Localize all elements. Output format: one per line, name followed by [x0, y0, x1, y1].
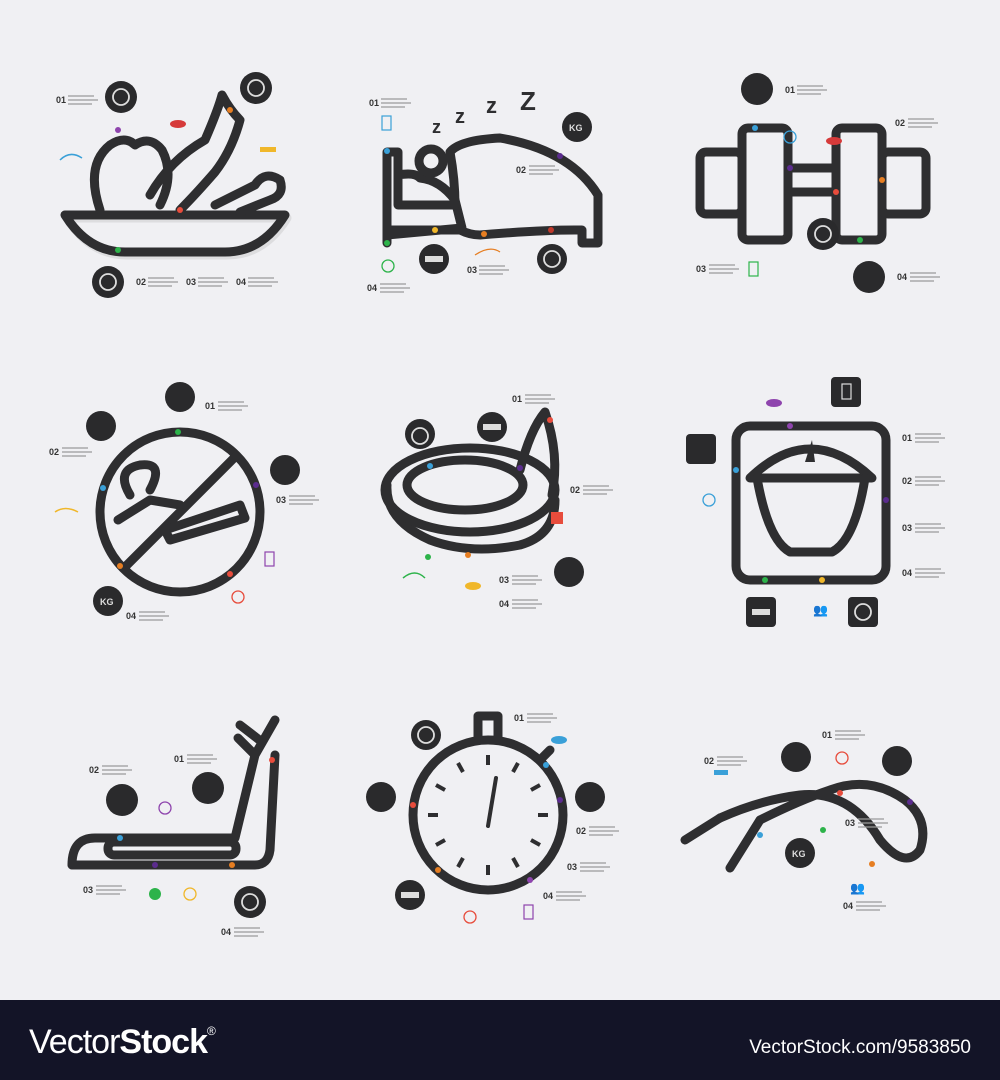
- panel: treadmill: 01: [174, 754, 184, 764]
- panel: tape measure: [385, 394, 613, 609]
- panel: tape measure: 01: [512, 394, 522, 404]
- panel: bed: 03: [467, 265, 477, 275]
- panel: weight scale: 04: [902, 568, 912, 578]
- icon: bowl: [67, 218, 287, 255]
- panel: jump rope: 02: [704, 756, 714, 766]
- panel: bed: Z: [520, 86, 536, 116]
- panel: dumbbell: 01: [785, 85, 795, 95]
- panel: no smoking: 04: [126, 611, 136, 621]
- panel: bed: KG: [569, 123, 582, 133]
- icon: tape measure: [387, 485, 555, 549]
- panel: weight scale: 01: [902, 433, 912, 443]
- panel: jump rope: 👥: [850, 881, 865, 895]
- icon: jump rope: [685, 818, 760, 868]
- panel: fruit bowl: [56, 72, 287, 298]
- panel: no smoking: 03: [276, 495, 286, 505]
- panel: bed: 01: [369, 98, 379, 108]
- panel: stopwatch: [366, 713, 619, 923]
- panel: stopwatch: 01: [514, 713, 524, 723]
- panel: bed: [367, 86, 598, 293]
- panel: treadmill: [72, 720, 275, 937]
- panel: weight scale: [686, 377, 945, 627]
- icon: no smoking sign: [100, 432, 260, 592]
- panel: jump rope: KG: [792, 849, 806, 859]
- panel: stopwatch: 02: [576, 826, 586, 836]
- panel: dumbbell: 02: [895, 118, 905, 128]
- panel: fruit bowl: 01: [56, 95, 66, 105]
- panel: bed: z: [455, 106, 465, 128]
- footer bar: [0, 1000, 1000, 1080]
- footer bar: VectorStock: [29, 1023, 207, 1061]
- panel: tape measure: 02: [570, 485, 580, 495]
- panel: fruit bowl: 02: [136, 277, 146, 287]
- panel: jump rope: 04: [843, 901, 853, 911]
- icon: dumbbell: [700, 152, 742, 214]
- icon: scale: [736, 426, 886, 580]
- panel: dumbbell: 03: [696, 264, 706, 274]
- panel: bed: 02: [516, 165, 526, 175]
- panel: treadmill: 03: [83, 885, 93, 895]
- panel: fruit bowl: 03: [186, 277, 196, 287]
- panel: stopwatch: 03: [567, 862, 577, 872]
- panel: jump rope: 01: [822, 730, 832, 740]
- footer bar: ®: [207, 1024, 216, 1038]
- panel: jump rope: 03: [845, 818, 855, 828]
- icon: stopwatch: [413, 740, 563, 890]
- icon: bed: [387, 152, 462, 235]
- panel: bed: 04: [367, 283, 377, 293]
- panel: weight scale: 02: [902, 476, 912, 486]
- panel: tape measure: 04: [499, 599, 509, 609]
- panel: dumbbell: [696, 73, 940, 293]
- panel: stopwatch: 04: [543, 891, 553, 901]
- panel: no smoking: KG: [100, 597, 114, 607]
- panel: jump rope: [685, 730, 923, 911]
- panel: treadmill: 02: [89, 765, 99, 775]
- panel: fruit bowl: 04: [236, 277, 246, 287]
- panel: bed: z: [432, 117, 441, 137]
- panel: bed: z: [486, 93, 497, 118]
- panel: weight scale: 👥: [813, 603, 828, 617]
- panel: no smoking: [49, 382, 319, 621]
- panel: treadmill: 04: [221, 927, 231, 937]
- panel: tape measure: 03: [499, 575, 509, 585]
- panel: weight scale: 03: [902, 523, 912, 533]
- icon: treadmill: [72, 720, 275, 865]
- panel: dumbbell: 04: [897, 272, 907, 282]
- panel: no smoking: 02: [49, 447, 59, 457]
- footer bar: VectorStock.com/9583850: [749, 1037, 971, 1058]
- panel: no smoking: 01: [205, 401, 215, 411]
